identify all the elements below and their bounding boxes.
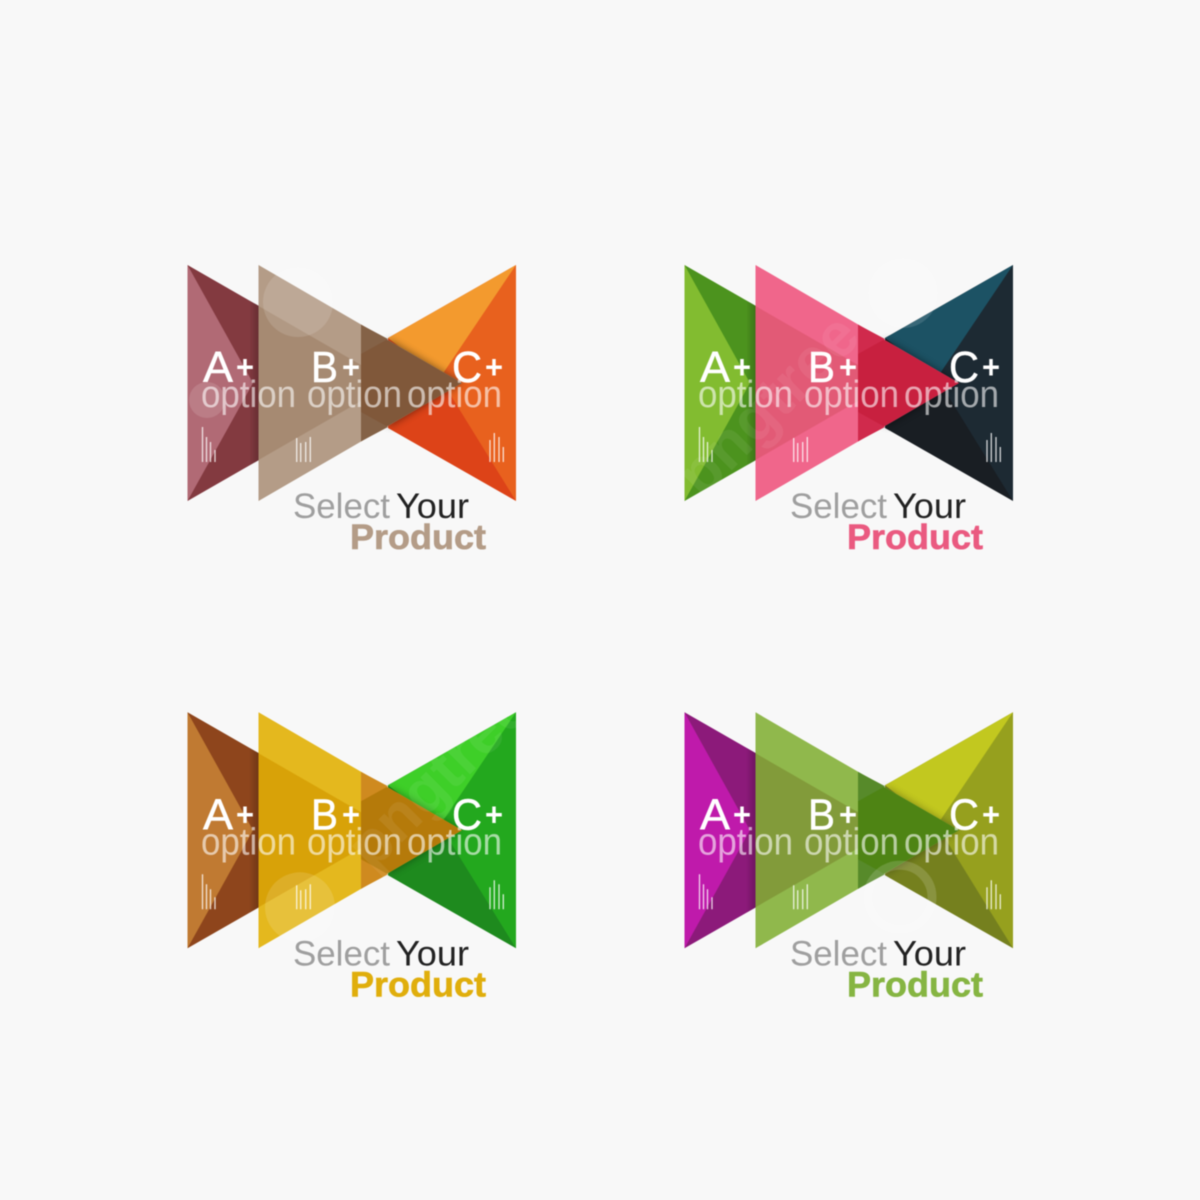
label B+ option: + — [839, 349, 857, 385]
label B+ option: B — [311, 343, 338, 392]
label B+ option — [804, 343, 899, 416]
label B+ option: B — [808, 343, 835, 392]
label B+ option — [804, 790, 899, 863]
label C+ option: + — [982, 349, 1000, 385]
heading: Product — [350, 965, 486, 1004]
watermark marks: pngtree — [663, 300, 873, 510]
icon: bars A — [700, 427, 712, 462]
triangle A — [188, 265, 259, 501]
icon: bars B — [794, 437, 807, 462]
panel: green, pink and navy option graphic — [663, 258, 1013, 557]
heading: Your — [396, 487, 469, 526]
heading: Your — [893, 934, 966, 973]
heading: Select — [790, 934, 887, 973]
label C+ option: option — [407, 374, 502, 416]
label B+ option: option — [804, 821, 899, 863]
label A+ option: A — [700, 343, 731, 392]
heading: Product — [350, 518, 486, 557]
icon: bars A — [202, 427, 215, 462]
triangle A — [188, 712, 259, 948]
watermark marks — [868, 865, 932, 929]
icon: bars B — [794, 884, 807, 909]
label B+ option: + — [342, 796, 360, 832]
triangle B — [756, 265, 959, 501]
panel: brown and orange option graphic — [188, 265, 516, 557]
label A+ option: A — [203, 343, 234, 392]
triangle C — [388, 265, 516, 501]
heading — [293, 934, 486, 1004]
label C+ option: option — [904, 821, 999, 863]
triangle B — [258, 712, 462, 948]
heading — [293, 487, 486, 557]
heading: Your — [396, 934, 469, 973]
label A+ option: + — [236, 349, 254, 385]
icon: bars B — [297, 884, 310, 909]
label C+ option: + — [485, 349, 503, 385]
label B+ option — [307, 790, 402, 863]
triangle B — [258, 265, 462, 501]
triangle A — [684, 712, 756, 948]
label C+ option: C — [949, 790, 979, 839]
icon: bars A — [700, 874, 712, 909]
label A+ option — [698, 343, 793, 416]
label C+ option: + — [485, 796, 503, 832]
label A+ option: + — [236, 796, 254, 832]
triangle A — [684, 265, 756, 501]
label A+ option: + — [733, 349, 751, 385]
heading: Select — [790, 487, 887, 526]
label A+ option: option — [201, 374, 296, 416]
label A+ option: option — [698, 374, 793, 416]
label A+ option — [201, 790, 296, 863]
label B+ option: option — [804, 374, 899, 416]
label C+ option: option — [904, 374, 999, 416]
label A+ option: A — [700, 790, 731, 839]
heading: Product — [847, 965, 983, 1004]
icon: bars A — [202, 874, 215, 909]
triangle B — [756, 712, 959, 948]
label C+ option: C — [452, 790, 482, 839]
triangle C — [388, 712, 516, 948]
label B+ option — [307, 343, 402, 416]
label C+ option: + — [982, 796, 1000, 832]
label A+ option — [698, 790, 793, 863]
watermark marks — [663, 258, 938, 510]
label A+ option: option — [698, 821, 793, 863]
label B+ option: B — [311, 790, 338, 839]
triangle C — [885, 712, 1013, 948]
label C+ option: option — [407, 821, 502, 863]
label C+ option — [407, 343, 503, 416]
label A+ option: option — [201, 821, 296, 863]
label C+ option: C — [452, 343, 482, 392]
icon: bars C — [987, 880, 1000, 909]
label B+ option: option — [307, 374, 402, 416]
icon: bars C — [987, 433, 1000, 462]
heading: Select — [293, 934, 390, 973]
icon: bars B — [297, 437, 310, 462]
label A+ option — [201, 343, 296, 416]
label C+ option: C — [949, 343, 979, 392]
label C+ option — [904, 343, 1000, 416]
panel: magenta and olive option graphic — [684, 712, 1013, 1004]
heading: Your — [893, 487, 966, 526]
icon: bars C — [490, 880, 503, 909]
watermark marks — [265, 673, 543, 942]
heading: Product — [847, 518, 983, 557]
label C+ option — [904, 790, 1000, 863]
panel: brown, yellow and green option graphic — [188, 673, 543, 1004]
label A+ option: + — [733, 796, 751, 832]
heading — [790, 487, 983, 557]
heading — [790, 934, 983, 1004]
triangle C — [885, 265, 1013, 501]
heading: Select — [293, 487, 390, 526]
label A+ option: A — [203, 790, 234, 839]
label B+ option: B — [808, 790, 835, 839]
label B+ option: + — [839, 796, 857, 832]
watermark marks — [189, 267, 333, 418]
icon: bars C — [490, 433, 503, 462]
label C+ option — [407, 790, 503, 863]
label B+ option: option — [307, 821, 402, 863]
label B+ option: + — [342, 349, 360, 385]
watermark marks: pngtree — [333, 673, 543, 882]
